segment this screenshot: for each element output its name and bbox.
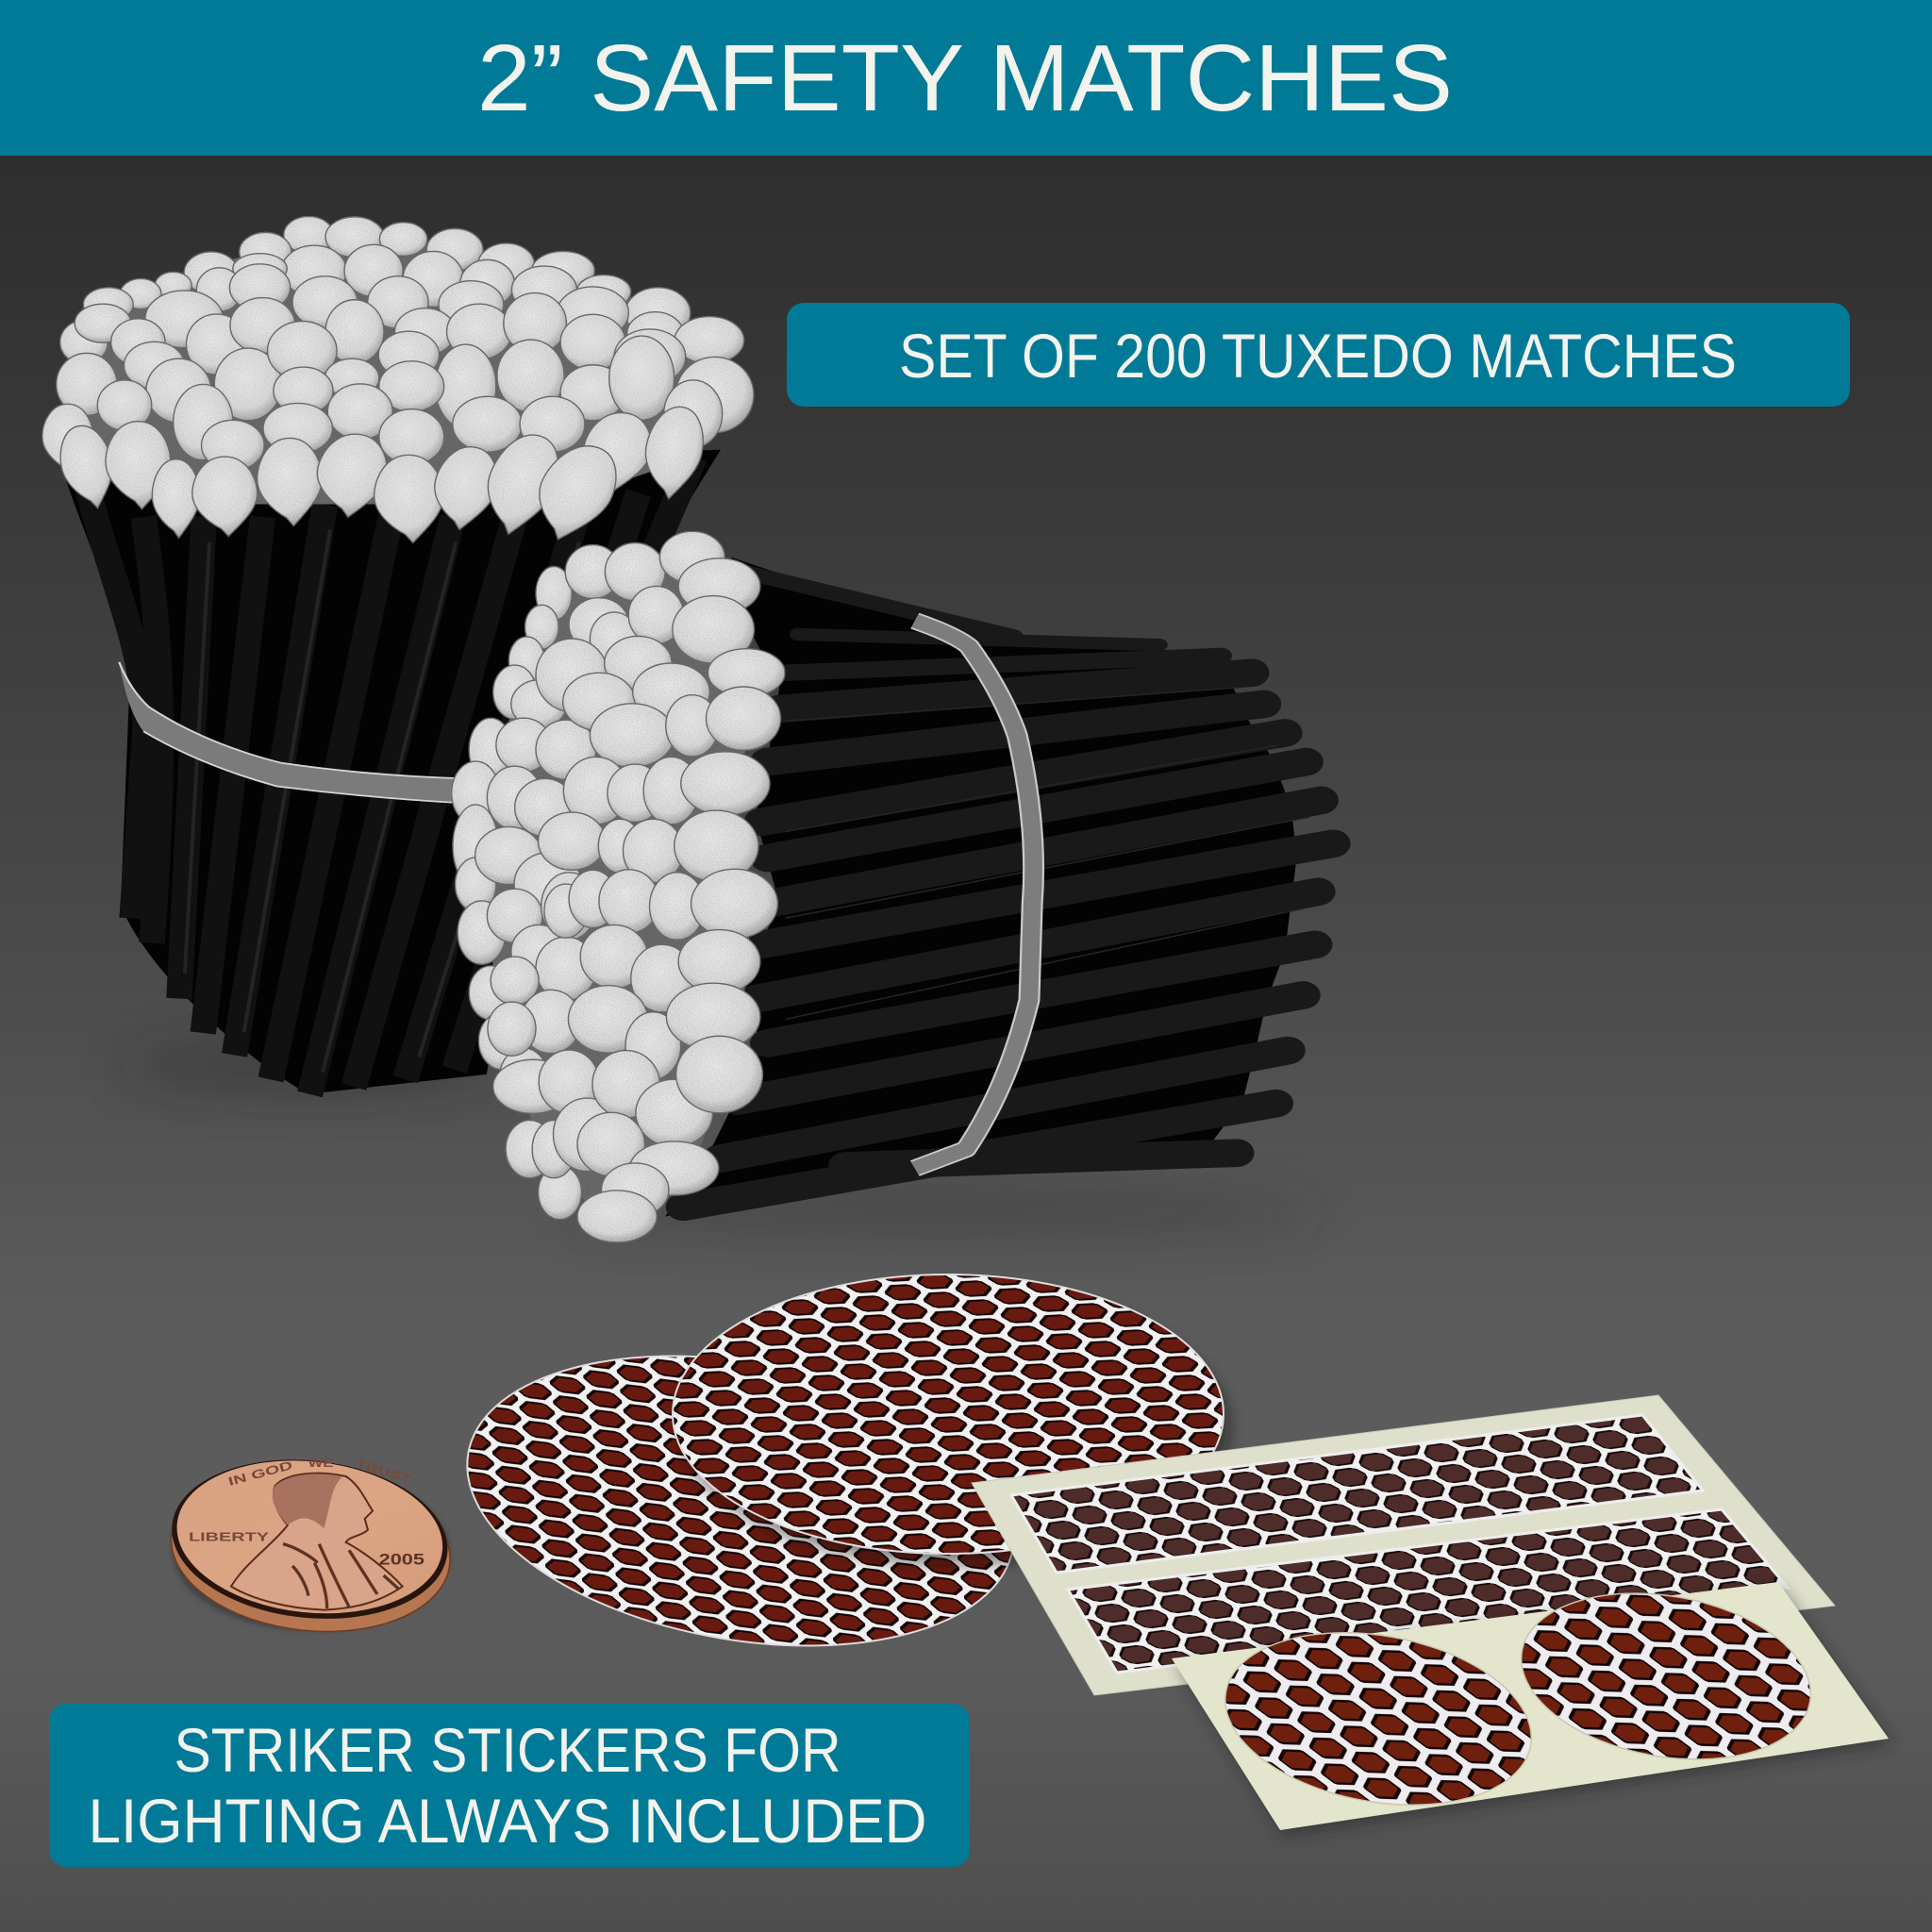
label: set of 200	[787, 303, 1850, 407]
penny: IN GOD	[226, 1458, 294, 1489]
sticker sheets	[972, 1395, 1892, 1836]
label line 2: LIGHTING ALWAYS INCLUDED	[89, 1786, 926, 1856]
disc shadow	[680, 1289, 1229, 1564]
black matchsticks	[665, 558, 1333, 1217]
rubber band	[119, 662, 463, 803]
round sticker sheet	[1172, 1572, 1892, 1836]
title: 2” SAFETY MATCHES	[477, 25, 1453, 131]
round sticker A	[1211, 1610, 1545, 1827]
round sticker B	[1508, 1572, 1824, 1781]
striker discs	[444, 1274, 1229, 1686]
portrait	[231, 1474, 403, 1610]
striker strip 1	[1011, 1415, 1703, 1573]
coin inscriptions: LIBERTY	[189, 1530, 270, 1543]
striker strip 2	[1068, 1509, 1788, 1673]
striker strip sheet	[972, 1395, 1835, 1695]
penny: 2005	[379, 1550, 425, 1568]
label: striker stickers	[49, 1704, 970, 1867]
rubber band	[915, 621, 1034, 1168]
striker disc: upper	[673, 1274, 1224, 1554]
heads backing	[482, 558, 761, 1222]
black matchsticks	[64, 450, 721, 1094]
penny: TRUST	[355, 1457, 413, 1487]
striker disc: lower	[444, 1316, 1037, 1686]
lying bundle of matches	[452, 531, 1333, 1242]
label text: SET OF 200 TUXEDO MATCHES	[899, 321, 1737, 391]
bundle shadow	[566, 1191, 1321, 1233]
bundle shadow	[123, 1041, 500, 1091]
standing bundle of matches	[42, 216, 754, 1094]
penny: WE	[308, 1457, 333, 1470]
white match heads	[42, 216, 754, 548]
label line 1: STRIKER STICKERS FOR	[174, 1715, 841, 1785]
white match heads	[452, 531, 785, 1242]
penny	[163, 1446, 458, 1645]
header banner	[0, 0, 1932, 156]
heads backing	[71, 235, 725, 504]
